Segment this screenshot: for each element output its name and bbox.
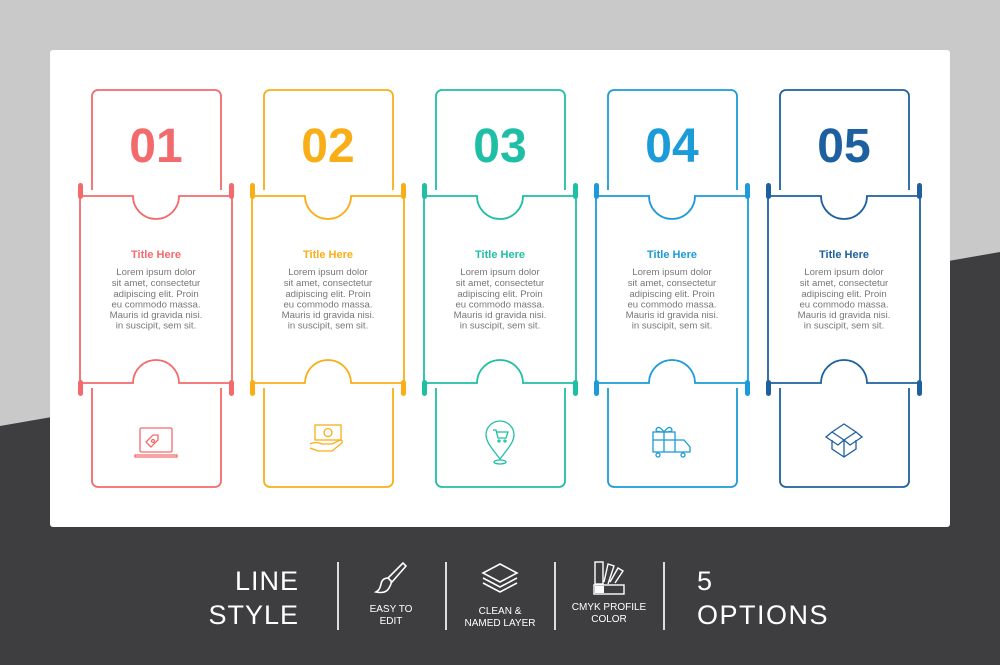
icon: open box <box>826 424 862 457</box>
heading: line style: STYLE <box>208 600 299 630</box>
card 1: 01 <box>129 120 183 173</box>
heading: 5 options: 5 <box>697 566 714 596</box>
card 5 <box>766 90 922 487</box>
card 5: 05 <box>817 120 871 173</box>
card 4: 04 <box>645 120 699 173</box>
card 3: 03 <box>473 120 527 173</box>
card 3 <box>422 90 578 487</box>
card 1: Title Here <box>131 249 181 261</box>
heading: line style: LINE <box>235 566 299 596</box>
bottom features bar <box>208 561 829 630</box>
card 4: Title Here <box>647 249 697 261</box>
feature: easy to edit: EASY TO <box>370 604 412 615</box>
card 3: Title Here <box>475 249 525 261</box>
card 1 <box>78 90 234 487</box>
feature: easy to edit <box>370 562 412 627</box>
heading: 5 options <box>697 566 829 630</box>
heading: line style <box>208 566 299 630</box>
main white panel <box>50 50 950 527</box>
feature: easy to edit: EDIT <box>380 616 402 627</box>
feature: cmyk: CMYK PROFILE <box>572 602 646 613</box>
feature: clean layer: CLEAN & <box>479 606 521 617</box>
feature: clean layer <box>465 563 535 629</box>
card 2 <box>250 90 406 487</box>
card 2: Title Here <box>303 249 353 261</box>
icon: laptop tag <box>135 428 177 457</box>
heading: 5 options: OPTIONS <box>697 600 829 630</box>
card 5: Title Here <box>819 249 869 261</box>
feature: cmyk <box>572 561 646 625</box>
feature: clean layer: NAMED LAYER <box>465 618 535 629</box>
card 4 <box>594 90 750 487</box>
icon: location cart <box>486 421 514 464</box>
feature: cmyk: COLOR <box>591 614 627 625</box>
card 2: 02 <box>301 120 355 173</box>
icon: gift truck <box>653 427 690 457</box>
icon: money hand <box>310 425 342 451</box>
